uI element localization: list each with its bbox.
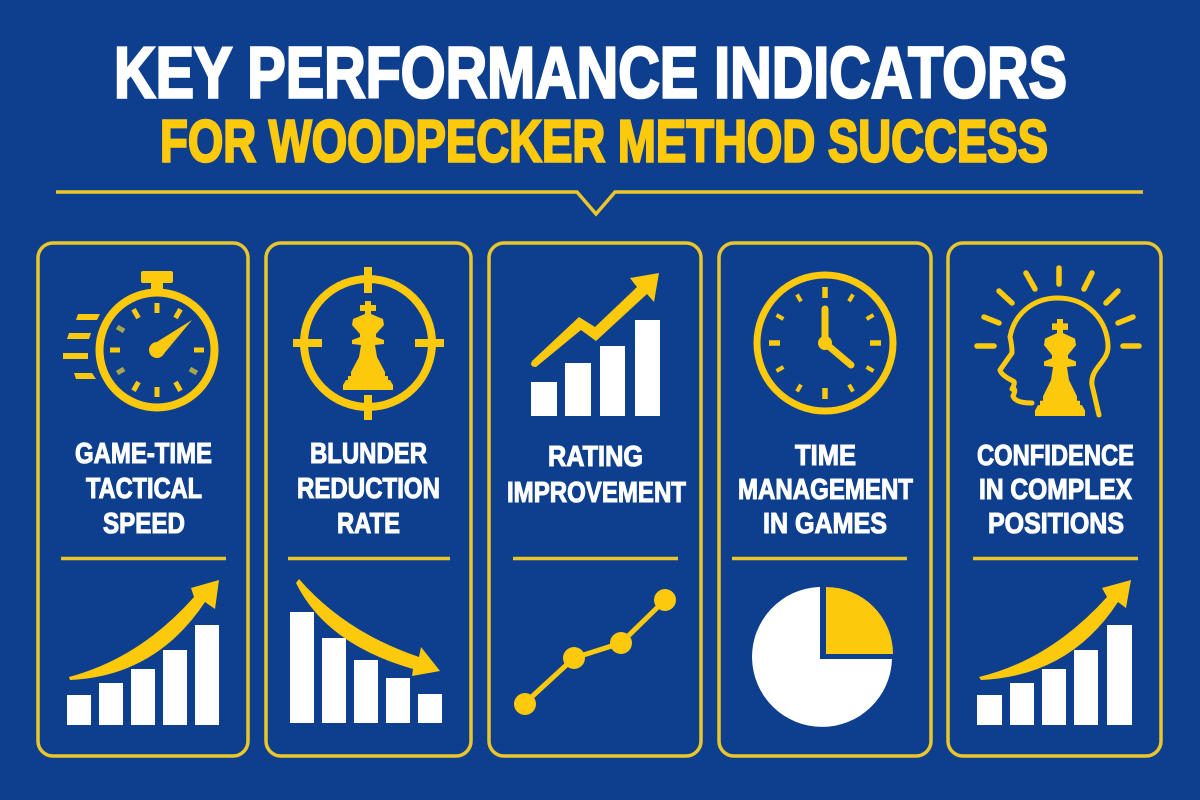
chart: pie xyxy=(752,587,893,727)
label: POSITIONS xyxy=(988,508,1124,540)
chart: falling bars with arrow xyxy=(290,579,442,723)
label: MANAGEMENT xyxy=(738,474,913,506)
label: IN GAMES xyxy=(763,508,887,540)
label: IN COMPLEX xyxy=(979,474,1133,506)
icon: crosshair with king xyxy=(293,267,444,420)
label: RATING xyxy=(548,441,643,473)
label xyxy=(738,440,913,540)
chart: rising bars with arrow xyxy=(67,580,219,725)
label: SPEED xyxy=(103,508,185,540)
panel: game-time tactical speed xyxy=(38,243,248,756)
label xyxy=(977,440,1134,540)
label: CONFIDENCE xyxy=(977,440,1134,472)
header divider with notch xyxy=(56,192,1143,214)
label: IMPROVEMENT xyxy=(507,477,686,509)
panel: confidence in complex positions xyxy=(948,243,1161,756)
label: GAME-TIME xyxy=(75,438,212,470)
title xyxy=(114,34,1067,174)
label: REDUCTION xyxy=(297,473,440,505)
label: TACTICAL xyxy=(86,473,202,505)
icon: stopwatch xyxy=(63,271,214,408)
chart: line with points xyxy=(514,589,676,715)
panel: rating improvement xyxy=(489,243,701,756)
label xyxy=(507,441,686,509)
icon: head with king and rays xyxy=(977,268,1139,416)
label: TIME xyxy=(795,440,856,472)
chart: rising bars with arrow xyxy=(977,580,1132,725)
label: RATE xyxy=(337,508,400,540)
panel: time management in games xyxy=(719,243,931,756)
label xyxy=(75,438,212,540)
label: BLUNDER xyxy=(310,438,427,470)
icon: clock xyxy=(757,275,893,411)
label xyxy=(297,438,440,540)
icon: bars with zigzag arrow xyxy=(531,273,660,416)
panel: blunder reduction rate xyxy=(266,243,471,756)
